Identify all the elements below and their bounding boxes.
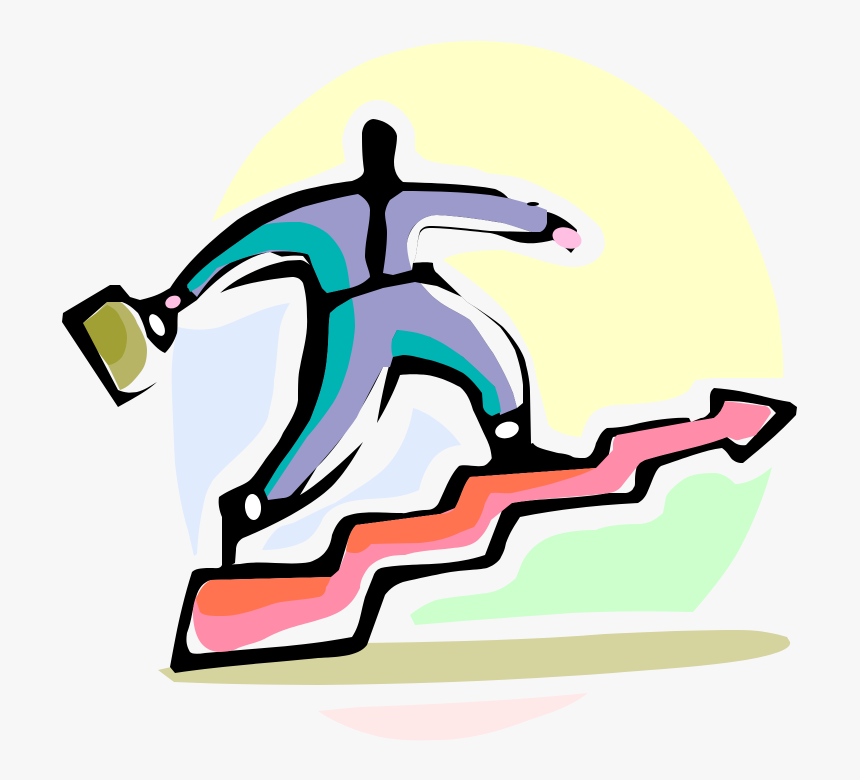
background strip along rear thigh	[420, 283, 523, 408]
sleeve mark	[527, 202, 539, 206]
purple left torso and arm	[187, 194, 370, 297]
teal right leg band	[391, 330, 501, 416]
businessman	[62, 119, 585, 565]
white front shoe spot	[244, 493, 262, 521]
pink left hand	[163, 293, 183, 311]
pale green cloud right	[410, 467, 772, 625]
pink reflection below	[318, 693, 588, 740]
body silhouette	[62, 119, 577, 565]
arrow stair outline	[170, 388, 797, 673]
pink right hand	[549, 223, 585, 253]
arrow orange upper step	[346, 468, 596, 553]
white rear shoe spot	[493, 419, 521, 441]
briefcase dark panel	[83, 305, 127, 365]
yellow sun circle	[212, 41, 783, 437]
pale blue cloud left	[172, 303, 290, 556]
pale blue cloud middle	[262, 408, 461, 550]
briefcase light panel	[83, 301, 147, 390]
background strip beneath rear arm	[197, 256, 310, 300]
teal left arm band	[187, 222, 350, 293]
background strip under front arm	[407, 215, 532, 270]
teal left leg band	[264, 298, 355, 497]
white hand spot	[146, 312, 168, 338]
arrow orange lower step	[196, 577, 331, 616]
olive ground shadow	[158, 630, 790, 685]
purple right torso and arm	[383, 191, 547, 275]
purple legs	[265, 282, 517, 500]
arrow pink body	[193, 401, 771, 652]
arrow inner background	[186, 401, 776, 654]
briefcase	[83, 301, 147, 390]
